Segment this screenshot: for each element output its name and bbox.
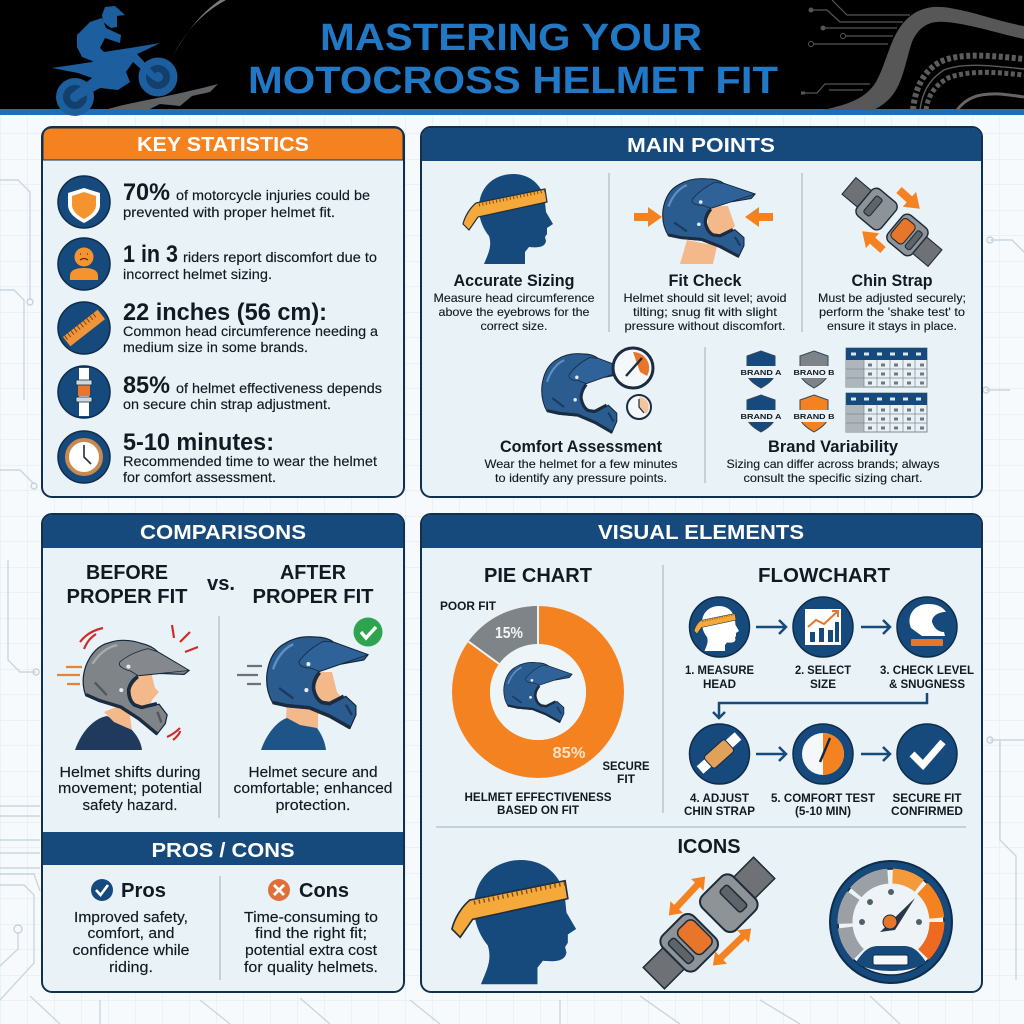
block: brand variability	[726, 437, 940, 485]
flow step 3: check level: 3. CHECK LEVEL	[880, 665, 974, 677]
decorative gray streaks	[105, 0, 226, 110]
heading: visual elements: VISUAL ELEMENTS	[598, 521, 804, 544]
title: MASTERING YOUR	[320, 17, 702, 59]
pros: Pros	[121, 880, 166, 902]
label: before proper fit: BEFORE	[86, 561, 168, 584]
header banner	[0, 0, 1024, 116]
flow step 3: check level: & SNUGNESS	[889, 679, 965, 691]
heading: pros and cons	[43, 832, 403, 865]
donut chart: 85%	[552, 745, 586, 762]
stat: 5-10 minutes	[123, 429, 377, 485]
flow step 2: select size	[793, 597, 853, 691]
icon: helmet in donut	[504, 662, 572, 723]
text: before description: Helmet shifts during	[60, 765, 200, 781]
icon: brand badges and sizing tables	[740, 348, 927, 432]
heading: key statistics	[43, 128, 403, 160]
block: chin strap	[818, 271, 966, 333]
decorative tire tracks and circuit lines	[801, 0, 1024, 110]
stat: 70 percent	[123, 179, 370, 220]
block: chin strap: perform the 'shake test' to	[819, 305, 965, 319]
panel: visual elements	[421, 514, 982, 995]
icon: brand badges and sizing tables: BRAND A	[740, 368, 782, 377]
title	[248, 17, 778, 102]
block: comfort assessment: Wear the helmet for a few minutes	[484, 457, 678, 471]
stat: 85 percent: 85%	[123, 372, 170, 399]
icon: brand badges and sizing tables: BRANO B	[794, 368, 835, 377]
flow step 1: measure head: 1. MEASURE	[685, 665, 754, 677]
stat: 85 percent: of helmet effectiveness depends	[176, 380, 382, 396]
heading: visual elements	[422, 515, 981, 548]
flow step 5: comfort test: 5. COMFORT TEST	[771, 793, 875, 805]
block: brand variability: Brand Variability	[768, 437, 899, 456]
block: accurate sizing: above the eyebrows for the	[438, 305, 590, 319]
icon: helmet fit check	[634, 179, 773, 264]
block: chin strap: ensure it stays in place.	[827, 319, 957, 333]
flow step 4: adjust chin strap: 4. ADJUST	[690, 793, 749, 805]
text: after description: comfortable; enhanced	[234, 781, 392, 797]
block: fit check: Helmet should sit level; avoid	[624, 291, 786, 305]
text: after description: protection.	[276, 798, 350, 814]
flow step 6: secure fit confirmed: CONFIRMED	[891, 806, 963, 818]
cons	[244, 879, 378, 976]
flow step 3: check level	[880, 597, 974, 691]
illustration: ill-fitting gray helmet	[57, 625, 198, 750]
flow step 6: secure fit confirmed: SECURE FIT	[892, 793, 962, 805]
donut chart: 15%	[495, 625, 523, 642]
text: after description	[234, 765, 392, 814]
stat: 22 inches	[123, 299, 378, 355]
stat: 22 inches: Common head circumference needing a	[123, 323, 378, 339]
stat: 1 in 3: incorrect helmet sizing.	[123, 266, 272, 282]
icon: helmet with gauge and clock	[542, 348, 653, 433]
flow step 1: measure head: HEAD	[703, 679, 736, 691]
pros: comfort, and	[88, 926, 174, 942]
flow step 4: adjust chin strap	[684, 724, 755, 818]
flow step 4: adjust chin strap: CHIN STRAP	[684, 806, 755, 818]
block: accurate sizing: correct size.	[480, 319, 548, 333]
block: accurate sizing: Measure head circumference	[434, 291, 595, 305]
heading: pie chart: PIE CHART	[484, 564, 592, 587]
pros: riding.	[109, 960, 153, 976]
text: before description	[58, 765, 202, 814]
pros: confidence while	[72, 943, 190, 959]
heading: comparisons	[43, 515, 403, 548]
stat: 1 in 3: riders report discomfort due to	[183, 249, 377, 265]
block: accurate sizing: Accurate Sizing	[454, 271, 574, 290]
block: comfort assessment: Comfort Assessment	[500, 437, 662, 456]
icon: large speedometer	[830, 861, 952, 983]
block: chin strap: Must be adjusted securely;	[818, 291, 966, 305]
illustration: well-fitted blue helmet	[237, 618, 382, 750]
cons: Cons	[299, 880, 349, 902]
label: before proper fit	[66, 561, 188, 608]
flow arrow	[756, 620, 786, 634]
icon: large head with tape	[452, 860, 576, 984]
cons: find the right fit;	[255, 926, 367, 942]
block: brand variability: consult the specific sizing chart.	[744, 471, 922, 485]
icon: motocross rider	[52, 6, 178, 116]
icon: large buckle with arrows	[637, 851, 781, 995]
block: comfort assessment	[484, 437, 678, 485]
heading: main points	[422, 128, 981, 161]
cons: Time-consuming to	[244, 910, 378, 926]
panel: key statistics	[42, 127, 404, 497]
flow step 1: measure head	[685, 597, 754, 691]
donut chart	[468, 606, 605, 762]
caption: pie chart: HELMET EFFECTIVENESS	[464, 792, 612, 804]
stat: 5-10 minutes: for comfort assessment.	[123, 469, 276, 485]
stat: 85 percent	[123, 372, 382, 412]
label: secure fit	[602, 761, 650, 786]
pros	[72, 879, 190, 976]
panel: main points	[421, 127, 982, 497]
icon: chin strap buckle	[838, 173, 946, 271]
heading: comparisons: COMPARISONS	[140, 521, 306, 544]
flow step 5: comfort test	[771, 724, 875, 818]
heading: pros and cons: PROS / CONS	[152, 839, 294, 862]
block: fit check: Fit Check	[668, 271, 742, 290]
icon: unhappy rider	[58, 238, 110, 290]
icon: shield	[58, 176, 110, 228]
block: chin strap: Chin Strap	[852, 271, 932, 290]
block: comfort assessment: to identify any pressure points.	[495, 471, 667, 485]
block: fit check: pressure without discomfort.	[624, 319, 786, 333]
flow arrow	[861, 747, 890, 761]
icon: brand badges and sizing tables: BRAND B	[794, 412, 835, 421]
label: before proper fit: PROPER FIT	[66, 585, 188, 608]
block: brand variability: Sizing can differ across brands; always	[726, 457, 940, 471]
flow arrow	[861, 620, 890, 634]
label: versus: vs.	[207, 572, 235, 595]
icon: chin strap	[58, 366, 110, 418]
cons: potential extra cost	[245, 943, 377, 959]
stat: 5-10 minutes: 5-10 minutes:	[123, 429, 274, 456]
stat: 70 percent: of motorcycle injuries could be	[176, 187, 370, 203]
block: fit check: tilting; snug fit with slight	[633, 305, 778, 319]
stat: 1 in 3: 1 in 3	[123, 241, 178, 268]
flow step 2: select size: 2. SELECT	[795, 665, 851, 677]
heading: icons: ICONS	[678, 835, 740, 858]
flow step 6: secure fit confirmed	[891, 724, 963, 818]
stat: 22 inches: medium size in some brands.	[123, 339, 308, 355]
title: MOTOCROSS HELMET FIT	[248, 60, 778, 102]
label: after proper fit: PROPER FIT	[252, 585, 374, 608]
label: secure fit: FIT	[617, 774, 635, 786]
stat: 70 percent: prevented with proper helmet fit.	[123, 204, 335, 220]
stat: 70 percent: 70%	[123, 179, 170, 206]
icon: ruler	[58, 302, 110, 354]
flow arrow	[756, 747, 786, 761]
stat: 1 in 3	[123, 241, 377, 282]
icon: head with measuring tape	[463, 174, 553, 264]
flow step 2: select size: SIZE	[810, 679, 836, 691]
text: after description: Helmet secure and	[248, 765, 378, 781]
icon: clock	[58, 431, 110, 483]
stat: 85 percent: on secure chin strap adjustment.	[123, 396, 331, 412]
heading: key statistics: KEY STATISTICS	[137, 133, 309, 156]
flow connector arrow	[713, 693, 927, 718]
icon: brand badges and sizing tables: BRAND A	[740, 412, 782, 421]
label: poor fit: POOR FIT	[440, 601, 496, 613]
heading: main points: MAIN POINTS	[627, 134, 775, 157]
heading: flowchart: FLOWCHART	[758, 564, 890, 587]
block: accurate sizing	[434, 271, 595, 333]
caption: pie chart: BASED ON FIT	[497, 805, 579, 817]
flow step 5: comfort test: (5-10 MIN)	[795, 806, 851, 818]
pros: Improved safety,	[74, 910, 188, 926]
panel: comparisons and pros cons	[42, 514, 404, 992]
label: secure fit: SECURE	[602, 761, 650, 773]
label: after proper fit: AFTER	[280, 561, 346, 584]
stat: 5-10 minutes: Recommended time to wear the helmet	[123, 453, 377, 469]
block: fit check	[624, 271, 786, 333]
text: before description: safety hazard.	[82, 798, 178, 814]
label: after proper fit	[252, 561, 374, 608]
text: before description: movement; potential	[58, 781, 202, 797]
caption: pie chart	[464, 792, 612, 817]
stat: 22 inches: 22 inches (56 cm):	[123, 299, 327, 326]
cons: for quality helmets.	[244, 960, 378, 976]
